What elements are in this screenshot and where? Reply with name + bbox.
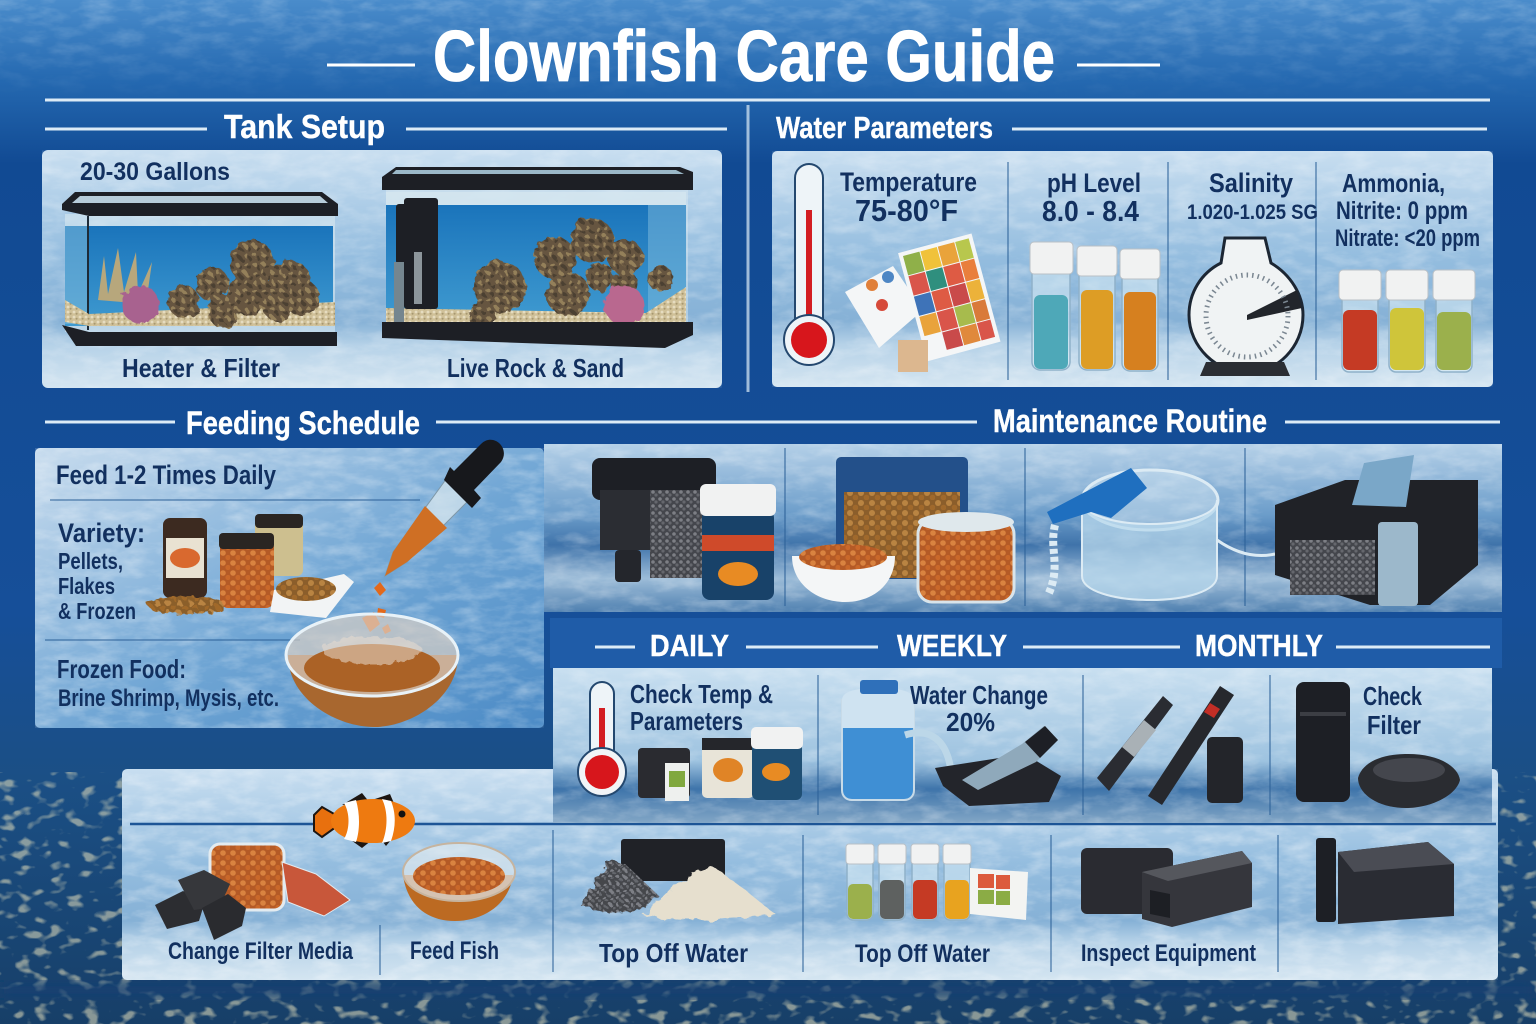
text: ammonia nitrite nitrate: Ammonia, — [1342, 168, 1445, 198]
heading: Feeding Schedule and Maintenance Routine: Feeding Schedule — [186, 405, 420, 441]
icon: heaters — [1097, 686, 1243, 805]
icon: thermometer small — [578, 682, 626, 796]
heading band: daily weekly monthly: DAILY — [650, 628, 729, 663]
text: check temp — [630, 679, 773, 736]
icon: test kits — [638, 727, 803, 801]
icon: equipment boxes — [1081, 848, 1252, 927]
icon: test colour chart — [845, 234, 1000, 372]
text: temperature — [840, 167, 977, 228]
text: variety: & Frozen — [58, 598, 136, 624]
text: check temp: Check Temp & — [630, 679, 773, 709]
text: check filter: Check — [1363, 681, 1422, 711]
text: frozen food: Brine Shrimp, Mysis, etc. — [58, 685, 279, 712]
text: ammonia nitrite nitrate — [1335, 168, 1480, 252]
panel: bottom tasks — [122, 769, 1498, 980]
text: variety — [58, 518, 145, 624]
icon: filter and air pump — [1296, 682, 1460, 808]
icon: filter canister — [592, 458, 716, 582]
text: variety: Flakes — [58, 573, 115, 599]
icon: small aquarium — [62, 192, 338, 346]
label: heater and filter: Heater & Filter — [122, 353, 280, 383]
icon: hydrometer gauge — [1189, 238, 1303, 376]
label: feed fish: Feed Fish — [410, 937, 499, 965]
text: pH level: 8.0 - 8.4 — [1042, 196, 1139, 228]
text: ammonia nitrite nitrate: Nitrite: 0 ppm — [1336, 197, 1468, 225]
panel: maintenance image strip — [544, 444, 1502, 612]
heading: Tank Setup: Tank Setup — [224, 108, 385, 145]
label: inspect equipment: Inspect Equipment — [1081, 940, 1256, 967]
icon: hang-on filter — [1275, 455, 1478, 606]
label: live rock and sand: Live Rock & Sand — [447, 353, 624, 383]
label: top off water second: Top Off Water — [855, 940, 990, 968]
icon: food jars — [148, 514, 354, 618]
icon: dropper — [362, 440, 504, 634]
text: variety: Variety: — [58, 518, 145, 548]
icon: filter media and pellets — [155, 844, 350, 940]
icon: filter media piles — [580, 839, 776, 920]
icon: water pouring — [1047, 468, 1275, 600]
text: check filter: Filter — [1367, 710, 1421, 740]
text: ammonia nitrite nitrate: Nitrate: <20 ppm — [1335, 225, 1480, 252]
icon: large aquarium — [382, 167, 693, 348]
label: top off water: Top Off Water — [599, 938, 748, 968]
icon: thermometer — [784, 164, 834, 365]
heading band: daily weekly monthly — [550, 618, 1502, 668]
panel: tank setup — [42, 150, 722, 388]
icon: test vials and chart — [846, 844, 1028, 920]
icon: feed bowl — [403, 843, 515, 921]
text: water change: 20% — [946, 707, 995, 737]
heading band: daily weekly monthly: MONTHLY — [1195, 628, 1323, 663]
text: frozen food — [57, 654, 279, 712]
label: 20-30 gallons: 20-30 Gallons — [80, 158, 230, 186]
text: pH level — [1042, 168, 1141, 228]
text: check temp: Parameters — [630, 706, 743, 736]
text: salinity: Salinity — [1209, 168, 1293, 198]
icon: clownfish — [314, 793, 415, 848]
panel: feeding schedule — [35, 440, 544, 728]
icon: ammonia vials — [1339, 270, 1475, 372]
icon: pump and filter — [1316, 838, 1454, 924]
text: water change: Water Change — [910, 680, 1048, 710]
heading: Feeding Schedule and Maintenance Routine: Maintenance Routine — [993, 403, 1267, 439]
text: temperature: Temperature — [840, 167, 977, 197]
text: variety: Pellets, — [58, 548, 123, 574]
heading band: daily weekly monthly: WEEKLY — [897, 628, 1007, 663]
icon: glass bowl — [286, 614, 458, 727]
heading: Feeding Schedule and Maintenance Routine — [45, 403, 1500, 441]
text: feed frequency: Feed 1-2 Times Daily — [56, 460, 276, 490]
text: check filter — [1363, 681, 1422, 740]
icon: tub and siphon — [935, 726, 1061, 806]
text: salinity: 1.020-1.025 SG — [1187, 201, 1318, 224]
panel: daily weekly monthly tasks — [553, 668, 1492, 823]
panel: water parameters — [772, 151, 1493, 387]
heading: Water Parameters: Water Parameters — [776, 110, 993, 145]
text: frozen food: Frozen Food: — [57, 654, 186, 684]
text: water change — [910, 680, 1048, 737]
label: change filter media: Change Filter Media — [168, 938, 354, 965]
text: salinity — [1187, 168, 1318, 224]
title: Clownfish Care Guide — [433, 17, 1055, 97]
icon: pH vials — [1030, 242, 1160, 371]
icon: food jar — [700, 484, 776, 600]
icon: pellet box and bowls — [792, 457, 1014, 602]
text: pH level: pH Level — [1047, 168, 1141, 198]
text: temperature: 75-80°F — [855, 193, 958, 228]
icon: water jug — [842, 680, 951, 800]
